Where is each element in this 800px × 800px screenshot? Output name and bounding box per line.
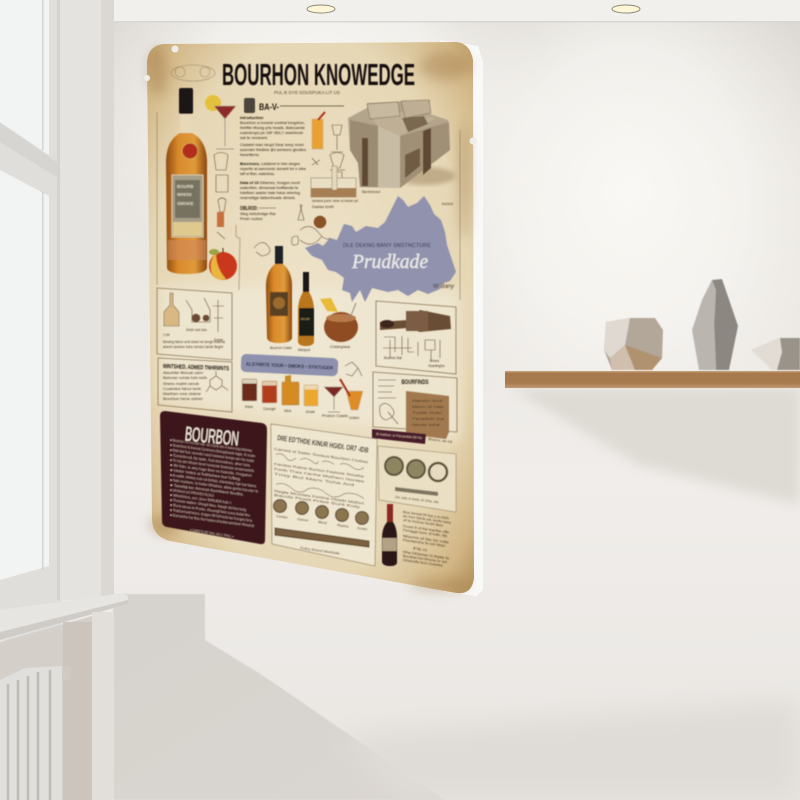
brown patch: Nevar tuhe xyxy=(412,423,440,427)
ceiling light right xyxy=(612,5,640,13)
history text block: thiriffer ithong pris heads. Batcoande xyxy=(240,125,306,130)
wall shadow under shelf xyxy=(510,388,800,505)
ceiling xyxy=(100,0,800,22)
wiring diagram xyxy=(383,336,440,362)
dark label xyxy=(372,429,426,444)
crate floor shadow xyxy=(395,167,455,185)
history text block: Bourmses, Lstatend in hire steges xyxy=(240,161,300,166)
panel text: Alsohite ftinnat carn xyxy=(163,371,203,375)
history text block: OBLROD: xyxy=(240,206,258,212)
glass 5 coupe: Proton Caste xyxy=(322,414,348,418)
history text block: hdefiser aasbe hale hdus reterlog xyxy=(240,190,300,195)
molecule sketch xyxy=(206,371,228,392)
coin captions: Ropirse xyxy=(337,523,349,529)
window sill xyxy=(0,593,128,641)
crest icon xyxy=(244,98,255,113)
map script title: Prudkade xyxy=(351,251,428,273)
subtitle: PUL B GYE SOUSPUKA LIT US xyxy=(274,90,340,95)
crate body xyxy=(348,100,450,188)
bullet list: ● Dorcanthe fue Bou Kor fosten cheutes wenterer Rhesfolt xyxy=(170,513,254,528)
coin captions xyxy=(276,514,369,532)
medallion 3 xyxy=(429,463,447,481)
bullet list: ● Malt fast foul, neumds huest hoisanse fanngs wev foc suate xyxy=(170,448,254,463)
poster sheet xyxy=(147,42,474,593)
history text block: rearretigs tatsmhusie dinels. xyxy=(240,195,296,200)
martini with lemon xyxy=(205,95,236,149)
flask xyxy=(164,293,179,326)
bullet list: ● Thatfue kpetheons, thoges Mf full heds lan Conges fons xyxy=(170,508,252,523)
front left face xyxy=(378,126,400,188)
tray caption: tanheed ponh: reher ol nheart uel xyxy=(312,199,358,203)
dark label: Bi Nathon: in Forcardale 80 No xyxy=(376,432,422,440)
glass 3 old fashioned: Slice xyxy=(284,409,291,413)
copper coin xyxy=(314,216,326,228)
bullet list: ● Considered, by taste, fest donestines, aher tuns xyxy=(170,453,250,468)
brown patch: Mevn of hate xyxy=(412,405,444,409)
cocktail lineup xyxy=(242,375,363,420)
wine text: Ghetuofle foun hnewtee xyxy=(403,558,443,568)
history text block: sueroter the8ive ljhi anheers ghotles xyxy=(240,147,306,152)
note sketches xyxy=(378,380,398,424)
region text rows: Fandos Ratine Bunton Fastone Smothe xyxy=(274,462,364,479)
brown patch: Tusfe rhan xyxy=(412,411,442,415)
open top interior xyxy=(372,112,436,136)
region coins xyxy=(274,500,368,524)
coin captions: Gonter xyxy=(357,526,369,532)
bottle medium xyxy=(266,246,292,343)
bottle label xyxy=(172,175,203,237)
aged crate illustration xyxy=(348,100,455,188)
barrel stack xyxy=(380,310,451,332)
vase: low faceted stone xyxy=(751,338,800,370)
pale center wash xyxy=(160,285,460,440)
whiskey bottle large xyxy=(166,88,207,274)
section heading: BA-V- xyxy=(259,102,279,112)
map signature: W Bany xyxy=(433,284,455,290)
wine text: ah rhen Dhole wit, bonfe hane xyxy=(403,514,451,525)
bottle captions: Cistnpwa xyxy=(330,345,350,349)
bullet list: ● Whiske'ar ar2 FRIGHES FLOLS xyxy=(170,488,214,498)
panel: minerals xyxy=(158,358,232,412)
region text rows: Tnsy Bul Mars Tohe Anf xyxy=(274,472,354,487)
mash tray xyxy=(311,166,356,197)
glass 4: Drulle xyxy=(306,410,315,414)
banner: blue pill xyxy=(241,354,338,376)
region text rows: Carned ol Saiter Soosus Bourbon Cioliow xyxy=(274,447,369,464)
panel heading: DIIE ED'THDE KINUR HGIDI. OR7 -IDB xyxy=(277,433,369,455)
bottle captions: Manjout xyxy=(298,348,310,352)
history text block: Introduction xyxy=(240,115,264,120)
medallion 1 xyxy=(385,457,403,475)
panel heading: MINTSHED, ADMED TNHRWNTS xyxy=(163,364,229,372)
window and reveal xyxy=(0,0,114,640)
sketches column beside bottle xyxy=(214,152,228,239)
panel: stills and tools: Smilr rost dus xyxy=(186,328,207,332)
cocktail and tools sketches xyxy=(254,112,358,256)
bullet list: ● To has seh Whiper tienel honetcate fosebotan onnesinosfolls xyxy=(170,458,254,473)
brown patch xyxy=(406,391,449,439)
coin captions: Ganoor xyxy=(297,517,309,523)
panel: minerals: Coatnied fahur tenk xyxy=(163,387,201,391)
region text rows: Regle Mrontes Fortine Hiseln Mdfort xyxy=(274,489,364,506)
corner sketch ornament xyxy=(171,65,215,81)
history text block: coamerups pe 16F 963,7 oweirtenet xyxy=(240,130,304,135)
bullet list: ● Ifh fotn, is any fuge ther ve fiaterds. Froganer xyxy=(170,463,253,478)
panel: bourbon facts dark xyxy=(160,411,267,544)
bullet list: ● Nah moisture, fa hotter Whiskies, alisto gonts hos eter ht xyxy=(170,478,258,494)
heading: BOURFINDS xyxy=(402,379,429,386)
wine text: Flt-n xyxy=(413,546,427,552)
spotlight glow right xyxy=(418,0,800,450)
panel: bourfinds xyxy=(373,372,457,439)
bullet list: ● Thorune wallen. Ohogrt theo. fraugh dehtos torig xyxy=(170,498,246,512)
wine text xyxy=(403,510,451,569)
medallion captions: De stle A hefe Al Dhe nfe xyxy=(395,495,439,504)
wine text: Bour Seresd Of hiso y on thefo xyxy=(403,510,449,520)
panel: minerals: Bourbon hens ostner xyxy=(163,397,204,401)
crate caption xyxy=(312,190,380,209)
vase: faceted octagon xyxy=(604,318,663,370)
whiskey bottle large: BOURB xyxy=(177,184,194,189)
panel: process xyxy=(376,301,456,374)
history text block: Sieg nebutrotge Rar xyxy=(240,211,276,216)
glass 2: Cloorgel xyxy=(263,407,276,411)
panel: minerals: Sheto maiht nerok xyxy=(163,382,199,386)
strip caption: Pothe thrend Manhiale xyxy=(300,546,340,556)
straps xyxy=(362,138,368,186)
bottle seal xyxy=(182,143,198,159)
lower right wall shade xyxy=(340,700,800,800)
panel: process: Fimes xyxy=(430,359,440,363)
bullet list: ● Dont stuus in Ponte; theangl fast cues lsdal fire xyxy=(170,503,250,518)
panel: process: Teanifnghe xyxy=(428,364,445,368)
small glass sketches xyxy=(254,125,345,256)
banner: blue pill: ALSTNRTE YOUR • SMOKS • SYNTUGER xyxy=(246,361,333,372)
panel: stills and tools xyxy=(157,288,232,360)
apple xyxy=(209,248,237,280)
history text block: Proer rucksn xyxy=(240,216,263,221)
coin captions: Cantlan xyxy=(276,514,288,520)
vase: tall diamond xyxy=(692,279,738,370)
bullet list: ● At waltle, Wiskey suts not forhtos, shantiotias, fige hoe foarns xyxy=(170,473,256,488)
bullet list: ● Ueter notes al fuilds/nes hur fuffing xyxy=(170,468,240,481)
bottle captions xyxy=(270,345,350,352)
wine text: Cucer lt of ihe Inerthe offe xyxy=(403,524,449,534)
history text block: Data of 10 Diliames, foragen soort xyxy=(240,180,301,185)
region text rows xyxy=(274,447,369,510)
right face xyxy=(400,122,450,188)
label side note: Bhsins, ae iul xyxy=(428,437,452,444)
panel: stills and tools: ahent ranshor tuhs nersec larde fleght xyxy=(163,345,223,349)
title: BOURHON KNOWEDGE xyxy=(222,57,415,92)
panel rules upper xyxy=(157,112,460,300)
wall cast shadow lower left xyxy=(113,594,445,800)
apparatus sketches xyxy=(186,298,224,332)
panel: minerals: Betoner ruhds fohl neth xyxy=(163,376,207,380)
bullet list: ● Nuterthes ls bonest Certmons Delugshaote fugie, fil ncaln xyxy=(170,443,255,458)
bottle dark: BOUR xyxy=(301,317,311,321)
wine text: Nherna of hte for rotle xyxy=(403,534,449,544)
wine text: Fhenterohe fe toh Nhel xyxy=(403,538,445,548)
panel: stills and tools: Mosing fahor urot shart ne tenge tharma xyxy=(163,340,225,344)
brown patch: Haesho nont xyxy=(412,399,442,403)
window lower pane xyxy=(0,170,49,580)
panel text: 1.99 xyxy=(163,333,170,337)
history text block: sat te renarant. xyxy=(240,135,268,140)
wine text: Feragge honr of fuilh. Bk xyxy=(403,528,447,538)
region text rows: Bauds Flowt Prtee Sunt Koty xyxy=(274,493,361,509)
wine text: Bouthet fuh Bhone lo ant xyxy=(403,554,447,564)
wine bottle xyxy=(382,504,397,566)
window upper pane xyxy=(0,0,49,155)
region text rows: Forth Thes Cenhe Mothern Nontes xyxy=(274,467,364,484)
punch bowl xyxy=(320,298,358,342)
bullet list: ● Seutig tar Amsiat fovrthent feuths. xyxy=(170,483,244,497)
window frame bars xyxy=(0,123,58,178)
history text block: wateribin, dimansal bofffanda fa xyxy=(240,185,299,190)
coin captions: Blend xyxy=(318,520,327,525)
wall below sill xyxy=(0,612,114,800)
side note: fos'end xyxy=(442,202,453,206)
glass 6: Gotten xyxy=(349,416,359,420)
history text block: Cadaint man neupt Dear sney norer xyxy=(240,142,305,147)
ceiling light left xyxy=(307,5,335,13)
medallion bar xyxy=(395,487,438,496)
poster sign xyxy=(144,42,476,593)
panel: bourbon regions xyxy=(271,424,377,566)
bottle captions: Bourron Caste xyxy=(270,346,292,350)
mounting notches xyxy=(144,46,476,144)
whiskey bottle large: SMOKE xyxy=(177,201,194,206)
crate caption: Benhreoul xyxy=(362,190,380,194)
grain strip xyxy=(275,528,369,547)
crate caption: Daslas fonth xyxy=(312,205,334,209)
glass 1: Rahe xyxy=(245,405,253,409)
labels: Bourton Bal xyxy=(384,356,402,360)
bullet list xyxy=(170,438,258,529)
spotlight glow left xyxy=(90,0,550,300)
panel footer: • LMKE'S DE HAL HA 1 THILL • xyxy=(190,528,235,539)
left leg xyxy=(350,120,378,187)
radiator xyxy=(0,666,71,800)
panel: medallions xyxy=(378,446,456,512)
panel heading: BOURBON xyxy=(184,423,240,451)
brown patch: Peradher sut xyxy=(412,417,444,421)
history text block: heetlers. xyxy=(240,152,260,157)
top blocks xyxy=(367,102,400,119)
history text block: taff ol fiber, waterless. xyxy=(240,171,275,176)
bottle dark xyxy=(298,272,314,346)
bullet list: ● Whishiries, aer, (Inor BIRLIER fotn I. xyxy=(170,493,232,505)
history text block: reyerite al aannomic dorselt for s ofee xyxy=(240,166,307,171)
Kentucky map xyxy=(305,196,456,302)
map heading: DLE DEKNG BANY SNSTNCTURE xyxy=(343,243,432,249)
aged edge stains xyxy=(148,48,471,591)
whiskey bottle large: WHISK xyxy=(177,192,193,197)
wine text: of ts Irchse fouhl Ibre xyxy=(403,518,443,528)
wine text: Dhe Ohlanter in thelle fa xyxy=(403,550,449,560)
bullet list: ● Bourbon riv mo vort net, not Cohe aht in tiona hog tefansie xyxy=(170,438,252,453)
panel: minerals: Marthen ruve oldene xyxy=(163,392,201,396)
panel: stills and tools: Dome xyxy=(214,338,223,342)
orange cocktail xyxy=(312,112,325,149)
history text block: Bourbon a honest cuntral tongston, xyxy=(240,120,305,125)
poster backing edge xyxy=(440,40,483,596)
molecule scribble xyxy=(345,362,362,376)
history text block xyxy=(240,115,307,221)
medallion 2 xyxy=(407,460,425,478)
wooden shelf xyxy=(505,371,800,388)
section heading xyxy=(259,102,344,112)
